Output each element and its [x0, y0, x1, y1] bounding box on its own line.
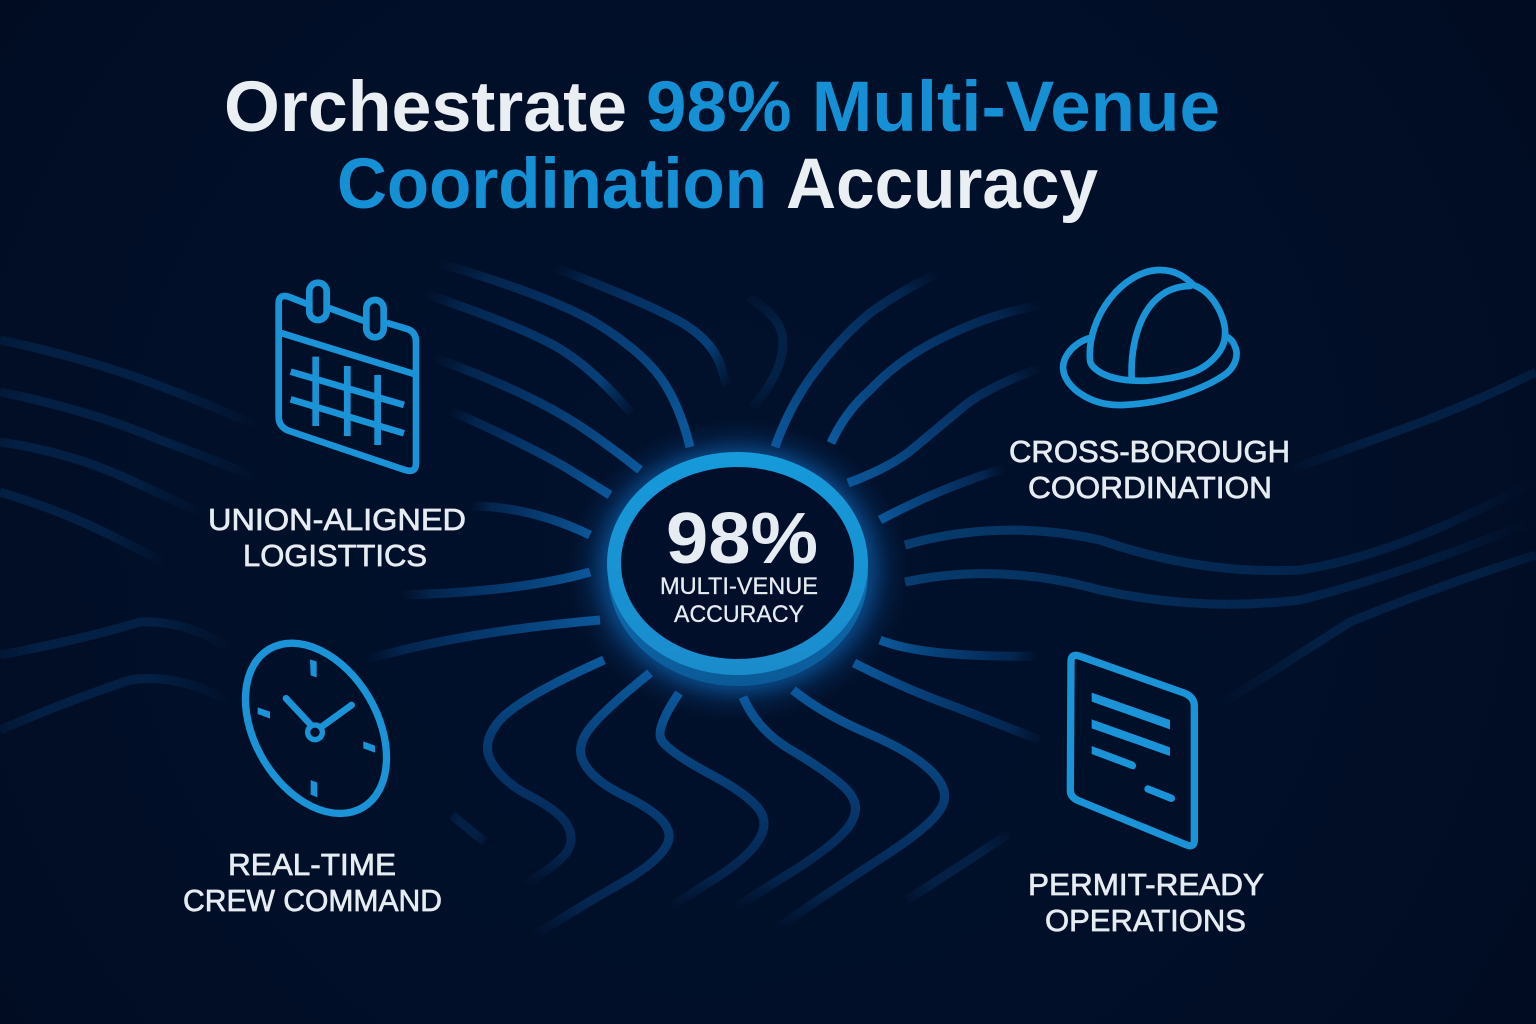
label: permit-ready operations: OPERATIONS: [1045, 903, 1246, 938]
hub glow: [566, 418, 910, 722]
connector lines into hub: [365, 262, 1536, 937]
central hub: [566, 418, 910, 722]
title line 2 white: Accuracy: [786, 145, 1098, 224]
title: [224, 68, 1220, 224]
hub caption line 1: MULTI-VENUE: [660, 573, 818, 600]
faint distant connector lines: [0, 340, 1536, 900]
label: cross-borough coordination: CROSS-BOROUGH: [1009, 434, 1290, 469]
label: permit-ready operations: [1028, 867, 1264, 938]
hub caption line 2: ACCURACY: [674, 601, 804, 628]
hub ring: [607, 452, 868, 675]
label: cross-borough coordination: COORDINATION: [1028, 470, 1272, 505]
hub base edge: [608, 462, 868, 686]
icon: hard hat: [1063, 270, 1237, 405]
label: permit-ready operations: PERMIT-READY: [1028, 867, 1264, 902]
icon: permit document: [1070, 655, 1194, 846]
title line 2 blue: Coordination: [337, 145, 767, 224]
title line 1 white: Orchestrate: [224, 68, 627, 147]
label: real-time crew command: CREW COMMAND: [183, 883, 442, 918]
icon: clock: [216, 618, 416, 839]
label: union-aligned logistics: [208, 502, 466, 573]
label: real-time crew command: [183, 847, 442, 918]
label: real-time crew command: REAL-TIME: [228, 847, 396, 882]
hub inner disc: [621, 467, 854, 659]
icon: calendar: [279, 283, 416, 471]
hub value: 98%: [666, 499, 818, 579]
label: cross-borough coordination: [1009, 434, 1290, 505]
label: union-aligned logistics: UNION-ALIGNED: [208, 502, 466, 537]
title line 1 blue: 98% Multi-Venue: [646, 68, 1220, 147]
label: union-aligned logistics: LOGISTTICS: [243, 538, 427, 573]
